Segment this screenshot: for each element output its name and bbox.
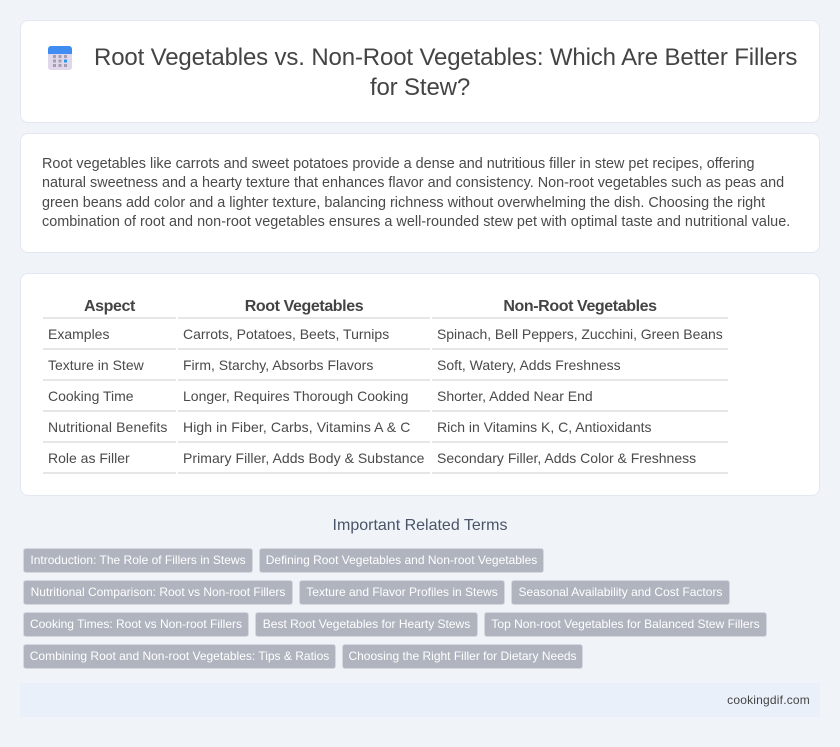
intro text: green beans add color and a lighter texture, balancing richness without overwhelming the dish. Choosing the right [42, 195, 765, 211]
tag [511, 580, 730, 605]
footer [20, 683, 820, 717]
tag row 2: Nutritional Comparison: Root vs Non-root Fillers [31, 585, 285, 599]
tag row 1 [23, 548, 253, 573]
table: Longer, Requires Thorough Cooking [183, 388, 408, 404]
header aspect: Aspect [84, 298, 135, 315]
row 5: Role as Filler [48, 450, 130, 466]
row 2: Texture in Stew [48, 357, 144, 373]
tag row 3: Cooking Times: Root vs Non-root Fillers [30, 617, 242, 631]
row 4: Nutritional Benefits [48, 419, 168, 435]
tag [299, 580, 505, 605]
tag [342, 644, 583, 669]
table: Primary Filler, Adds Body & Substance [183, 450, 425, 466]
title: Root Vegetables vs. Non-Root Vegetables: Which Are Better Fillers [94, 44, 797, 71]
tag [259, 548, 544, 573]
tag: Texture and Flavor Profiles in Stews [306, 585, 498, 599]
tag row 2 [23, 580, 293, 605]
intro text [42, 156, 790, 230]
table: Firm, Starchy, Absorbs Flavors [183, 357, 373, 373]
title line 2: for Stew? [370, 74, 470, 101]
table: Rich in Vitamins K, C, Antioxidants [437, 419, 652, 435]
tag: Choosing the Right Filler for Dietary Needs [348, 649, 577, 663]
tag: Top Non-root Vegetables for Balanced Stew Fillers [491, 617, 760, 631]
tag: Best Root Vegetables for Hearty Stews [263, 617, 470, 631]
header non-root: Non-Root Vegetables [503, 298, 657, 315]
tag: Defining Root Vegetables and Non-root Vegetables [266, 553, 537, 567]
table: Soft, Watery, Adds Freshness [437, 357, 621, 373]
intro text: combination of root and non-root vegetables ensures a well-rounded stew pet with optimal taste and nutritional value. [42, 214, 790, 230]
table: Shorter, Added Near End [437, 388, 593, 404]
header root: Root Vegetables [245, 298, 363, 315]
tag [484, 612, 767, 637]
tag [255, 612, 478, 637]
tag row 3 [23, 612, 249, 637]
tag: Seasonal Availability and Cost Factors [519, 585, 722, 599]
row 3: Cooking Time [48, 388, 134, 404]
related terms heading: Important Related Terms [333, 517, 507, 534]
footer: cookingdif.com [727, 693, 810, 707]
panel: intro [20, 133, 820, 253]
table [43, 298, 728, 474]
intro text: Root vegetables like carrots and sweet potatoes provide a dense and nutritious filler in stew pet recipes, offering [42, 156, 754, 172]
table: High in Fiber, Carbs, Vitamins A & C [183, 419, 410, 435]
intro text: natural sweetness and a hearty texture that enhances flavor and consistency. Non-root vegetables such as peas and [42, 175, 784, 191]
tag row 1: Introduction: The Role of Fillers in Stews [30, 553, 246, 567]
table: Spinach, Bell Peppers, Zucchini, Green Beans [437, 326, 723, 342]
row 1: Examples [48, 326, 109, 342]
tag row 4 [23, 644, 336, 669]
table: Carrots, Potatoes, Beets, Turnips [183, 326, 389, 342]
icon: calendar [48, 46, 72, 70]
table: Secondary Filler, Adds Color & Freshness [437, 450, 696, 466]
tag row 4: Combining Root and Non-root Vegetables: Tips & Ratios [30, 649, 329, 663]
title card [20, 20, 820, 123]
panel: comparison table [20, 273, 820, 496]
